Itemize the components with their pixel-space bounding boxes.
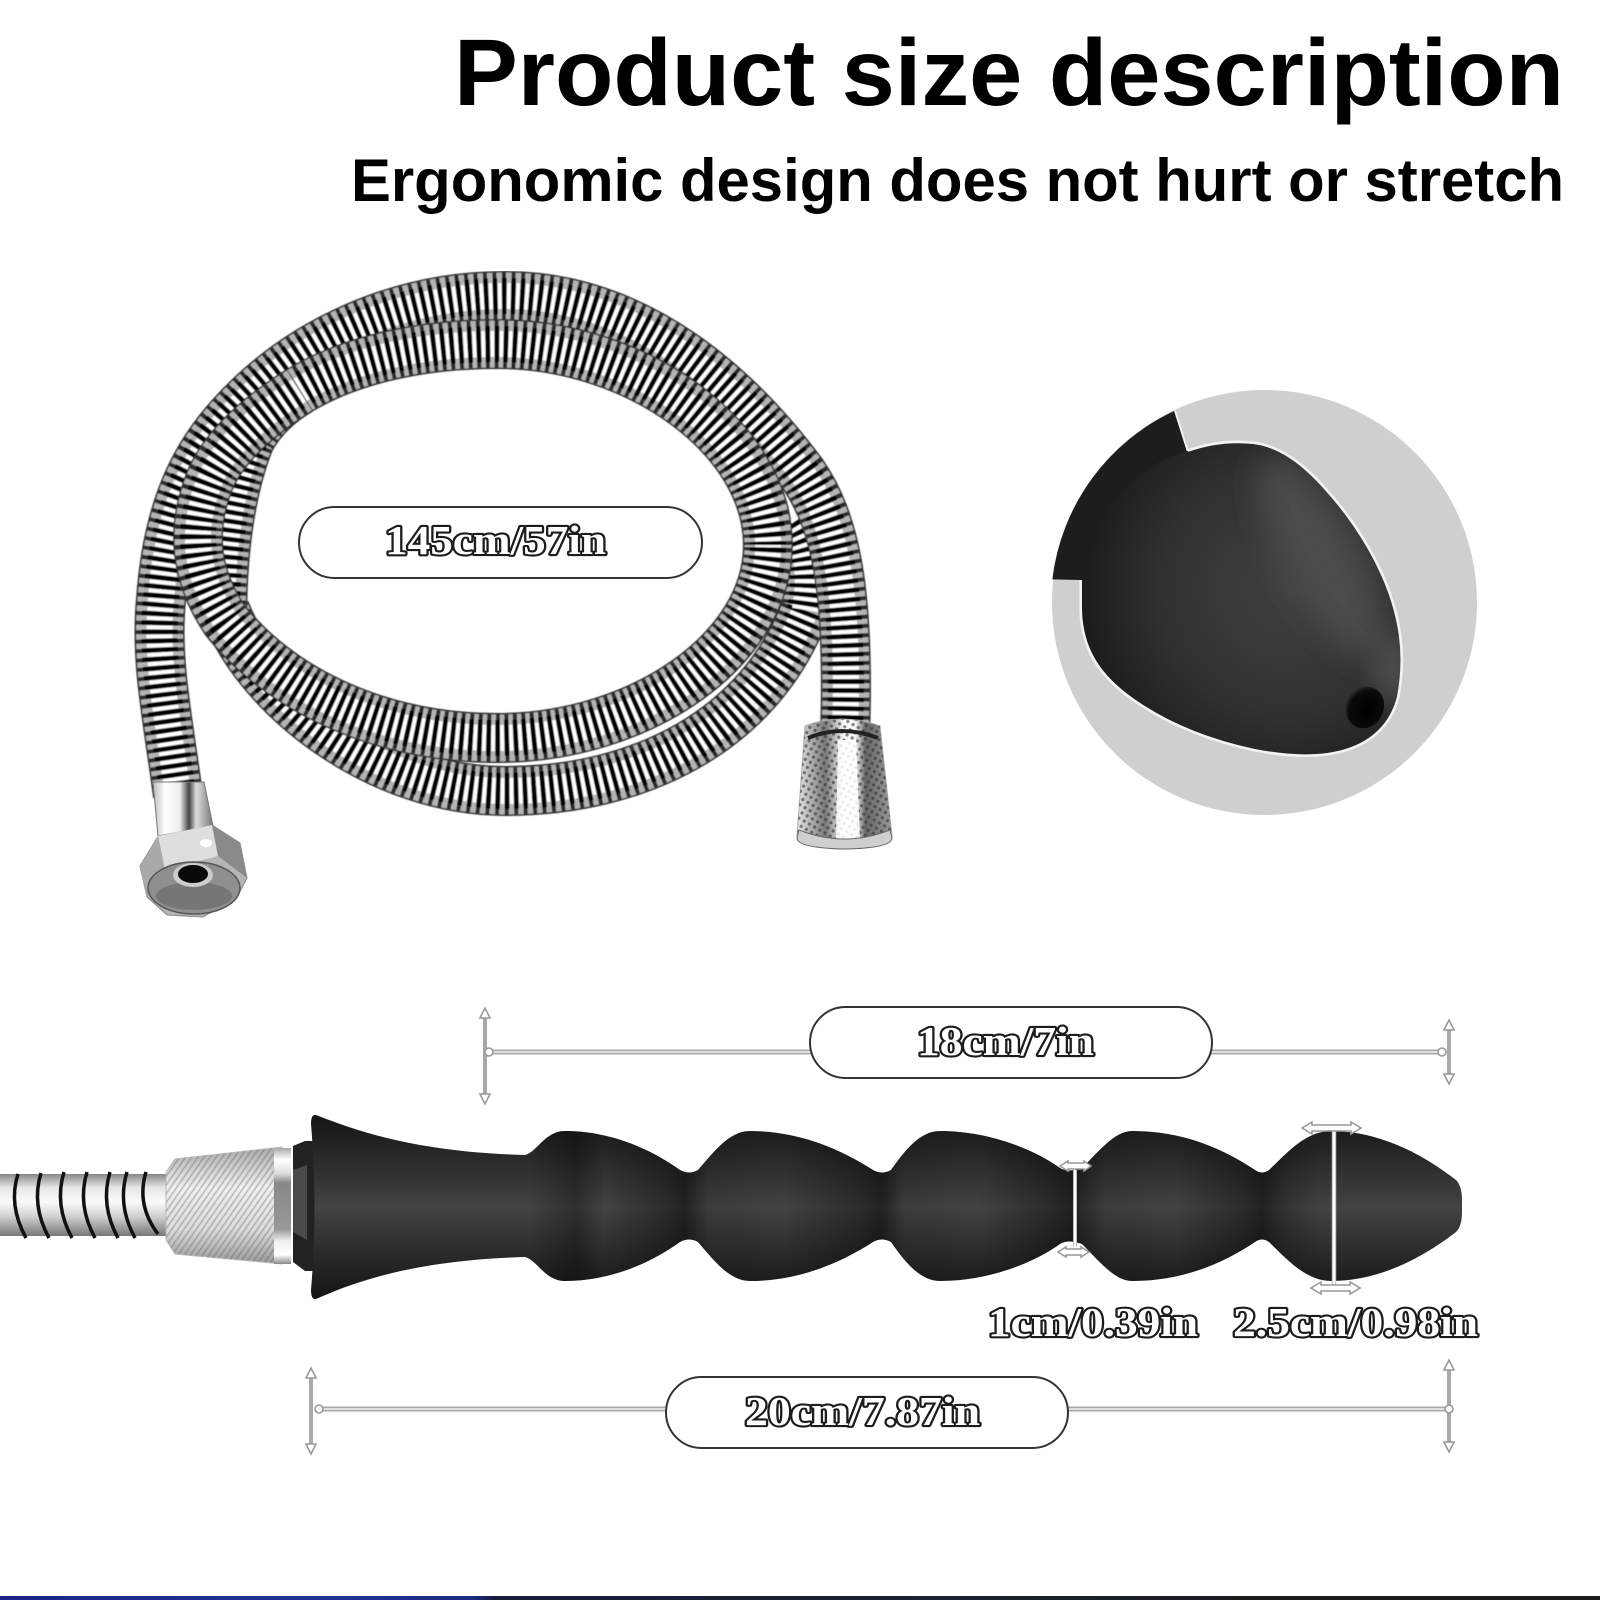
dimension: 20cm: 20cm/7.87in [745,1388,980,1434]
hose length label: 145cm/57in [385,517,606,563]
hex base face [293,1165,307,1240]
dimension: 20cm [306,1360,1454,1454]
coiled metal hose [159,296,846,795]
knurled connector [166,1147,291,1264]
hex base [293,1141,315,1271]
icon: left hex nut [140,782,247,917]
beaded silicone body [311,1115,1462,1299]
label: 1cm: 1cm/0.39in [988,1299,1198,1345]
hose length label [299,507,702,578]
dimension: 18cm: 18cm/7in [917,1018,1094,1064]
outflow hole [1339,680,1391,735]
icon: right knurled nut [797,719,892,849]
title: Product size description [454,20,1564,126]
panel: tip detail circle [1052,390,1477,815]
dimension: neck 1cm arrow [1058,1161,1091,1257]
hose stub at connector [0,1172,166,1238]
silicone tip [1081,411,1410,756]
bottom colour band [0,1596,1600,1600]
label: 2.5cm: 2.5cm/0.98in [1233,1299,1478,1345]
grey circle background [1052,390,1477,815]
dimension: bulb 2.5cm arrow [1302,1122,1361,1294]
dimension: 18cm [480,1007,1454,1104]
subtitle: Ergonomic design does not hurt or stretch [351,147,1564,214]
dark shaft wedge [1052,411,1188,580]
